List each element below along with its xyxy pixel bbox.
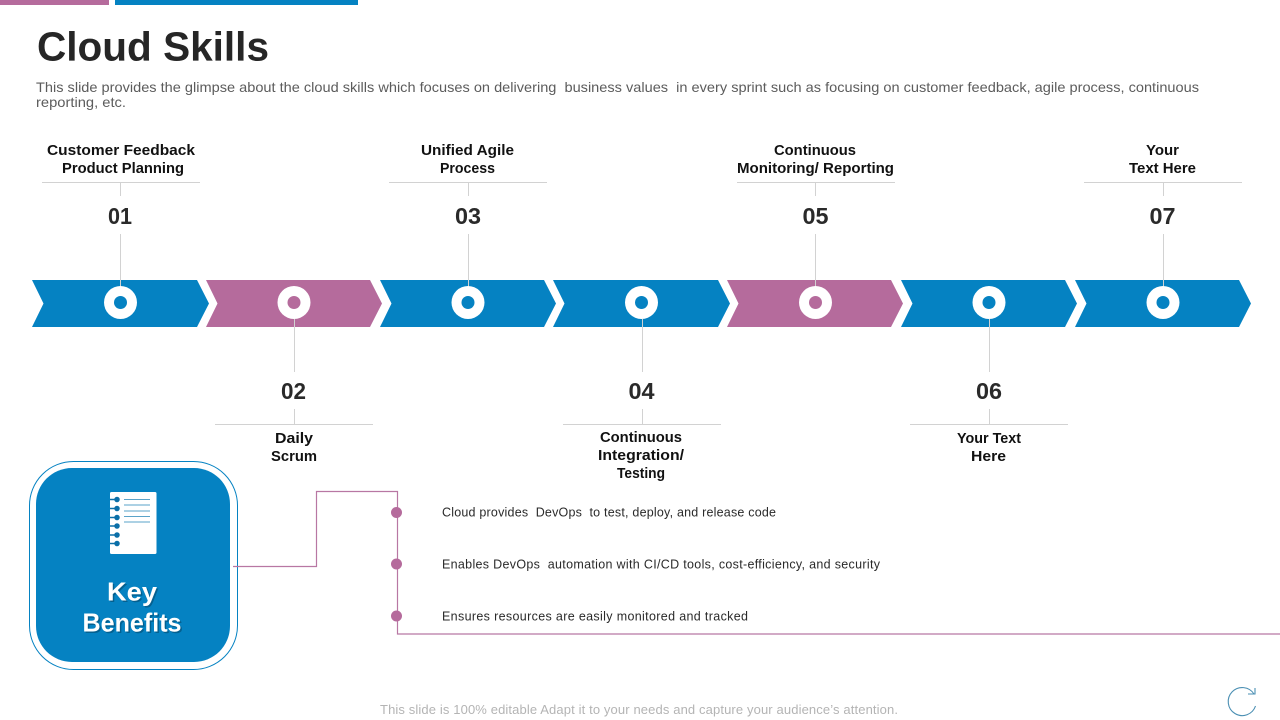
step 05 [737, 143, 895, 319]
step 02 [215, 286, 373, 465]
panel: key benefits [30, 462, 238, 670]
step 06: 06 [976, 378, 1002, 404]
step 07 [1084, 143, 1242, 319]
step 04: 04 [628, 378, 655, 404]
key benefits label: Key [108, 578, 159, 608]
step 03: 03 [455, 203, 481, 229]
icon: notebook [110, 492, 156, 554]
icon: refresh [1228, 688, 1256, 716]
top accent bars [0, 0, 358, 5]
step 04: Continuous [600, 430, 682, 446]
step 03 [389, 143, 547, 319]
step 01 [42, 143, 200, 319]
key benefits label: Benefits [82, 608, 182, 638]
step 03: Unified Agile [421, 143, 514, 159]
key benefits label: Benefits [84, 609, 183, 639]
key benefits label [82, 576, 183, 639]
step 05: 05 [802, 203, 829, 229]
timeline chevrons [32, 280, 1251, 327]
step 01: Product Planning [62, 161, 184, 177]
footer note: This slide is 100% editable Adapt it to your needs and capture your audience’s attention. [380, 702, 898, 717]
step 01: 01 [108, 203, 132, 229]
step 05: Monitoring/ Reporting [737, 161, 894, 177]
description text: reporting, etc. [36, 94, 126, 110]
benefits list: Enables DevOps automation with CI/CD tools, cost-efficiency, and security [442, 558, 881, 572]
step 07: Your [1146, 143, 1179, 159]
step 04: Integration/ [598, 448, 684, 464]
step 02: 02 [281, 378, 306, 404]
step 05: Continuous [774, 143, 856, 159]
step 06: Your Text [957, 431, 1021, 447]
key benefits label: Key [107, 576, 158, 606]
step 07: Text Here [1129, 161, 1196, 177]
description text [36, 79, 1199, 110]
step 04: Testing [617, 466, 665, 482]
title: Cloud Skills [37, 24, 269, 70]
step 07: 07 [1150, 203, 1176, 229]
step 06: Here [971, 449, 1006, 465]
step 01: Customer Feedback [47, 143, 196, 159]
step 03: Process [440, 161, 495, 177]
benefits list: Ensures resources are easily monitored and tracked [442, 610, 748, 624]
step 02: Scrum [271, 449, 317, 465]
connector lines [233, 492, 1280, 634]
benefits list [391, 506, 881, 624]
description text: This slide provides the glimpse about the cloud skills which focuses on delivering business values in every sprint such as focusing on customer feedback, agile process, continuous [36, 79, 1199, 95]
benefits list: Cloud provides DevOps to test, deploy, and release code [442, 506, 776, 520]
step 02: Daily [275, 431, 313, 447]
step 06 [910, 286, 1068, 465]
step 04 [563, 286, 721, 482]
